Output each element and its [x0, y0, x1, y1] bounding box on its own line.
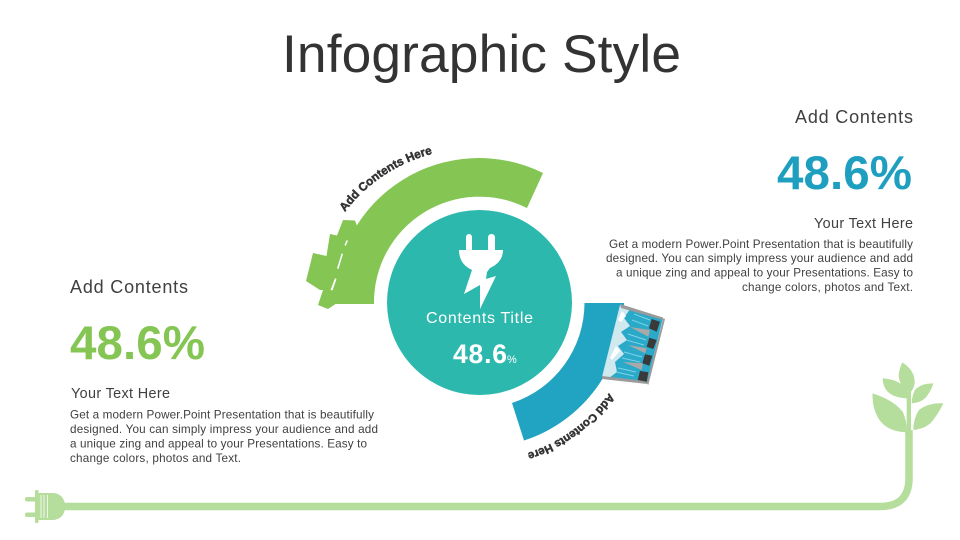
blue arc segment — [512, 303, 624, 440]
arc label: green: Add Contents Here — [340, 148, 432, 212]
percentage: left: 48.6% — [70, 317, 205, 370]
panel: central circle — [387, 210, 572, 395]
body text: left: designed. You can simply impress your audience and add — [70, 423, 378, 436]
body text: left: Get a modern Power.Point Presentation that is beautifully — [70, 408, 374, 422]
subheading: right: Your Text Here — [814, 216, 913, 232]
body text: right: Get a modern Power.Point Presentation that is beautifully — [609, 238, 913, 251]
body text: right: change colors, photos and Text. — [742, 281, 913, 294]
arc label: blue: Add Contents Here — [528, 392, 614, 458]
icon: green plug blocks on arc — [306, 220, 357, 309]
text block: right — [606, 107, 913, 294]
body text: left — [70, 408, 378, 465]
heading: right: Add Contents — [795, 107, 913, 127]
green arc segment — [334, 158, 543, 304]
icon: white plug with bolt — [459, 234, 503, 309]
icon: cord plug — [25, 490, 65, 523]
heading: left: Add Contents — [70, 277, 188, 297]
body text: right: a unique zing and appeal to your Presentations. Easy to — [616, 266, 913, 280]
percentage: center: 48.6 — [453, 339, 507, 369]
label: contents title: Contents Title — [426, 310, 533, 327]
body text: left: a unique zing and appeal to your Presentations. Easy to — [70, 438, 367, 450]
text block: left — [70, 277, 378, 465]
percentage: center: % — [507, 354, 517, 366]
body text: right — [606, 238, 913, 294]
body text: left: change colors, photos and Text. — [70, 452, 241, 465]
title: Infographic Style — [282, 25, 681, 84]
subheading: left: Your Text Here — [71, 386, 170, 402]
icon: leaf sprout — [873, 362, 943, 435]
percentage: right: 48.6% — [777, 147, 912, 200]
decoration: power cord — [60, 430, 909, 506]
body text: right: designed. You can simply impress your audience and add — [606, 252, 913, 265]
icon: blue plug strip on arc — [602, 304, 665, 385]
